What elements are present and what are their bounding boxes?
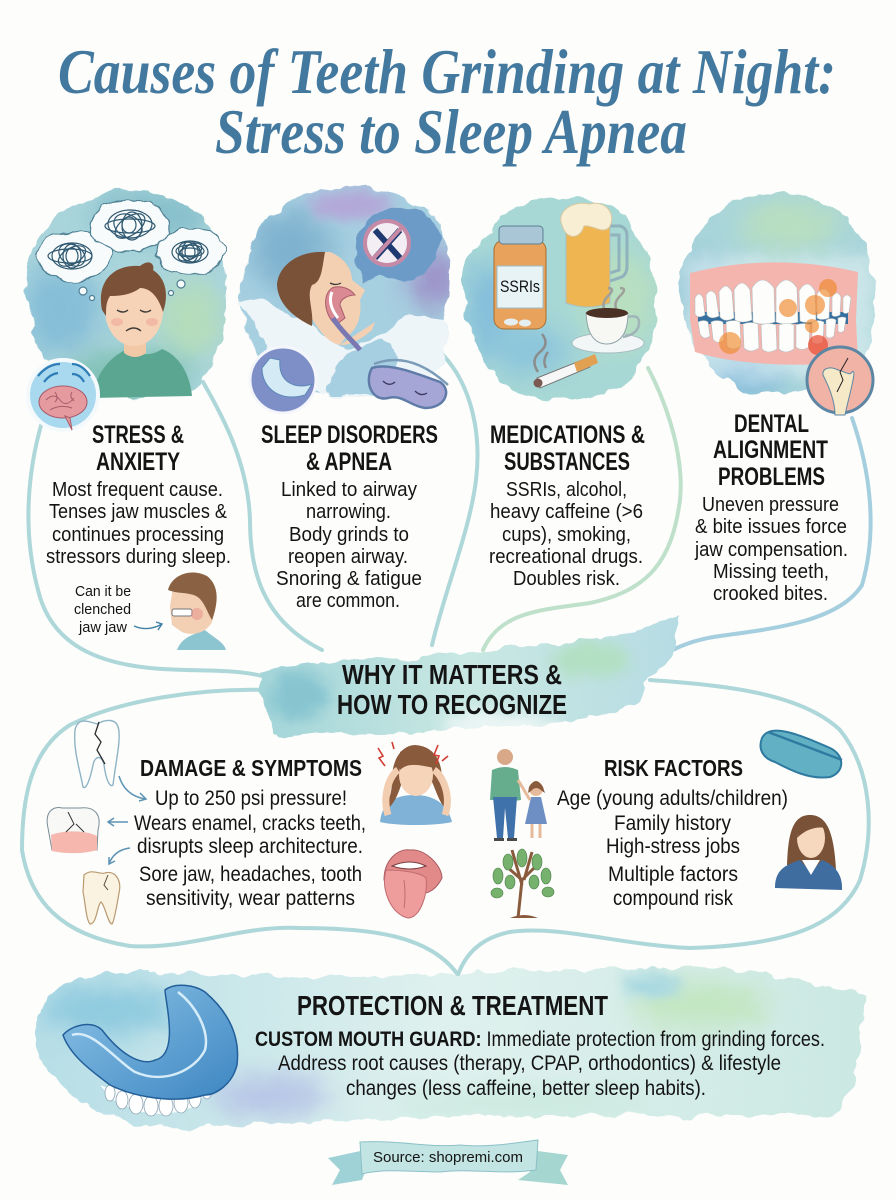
text: dental description: & bite issues force	[695, 516, 847, 538]
text: dental description: jaw compensation.	[694, 539, 848, 561]
text: risk factors: Family history	[614, 812, 731, 835]
text: damage and symptoms: Wears enamel, cracks teeth,	[134, 812, 366, 835]
text: treatment description	[255, 1028, 825, 1100]
heading: sleep disorders and apnea	[261, 421, 438, 476]
title: Stress to Sleep Apnea	[215, 97, 687, 167]
panel: dental alignment problems	[678, 191, 876, 600]
text: sleep description: Body grinds to	[289, 524, 409, 546]
banner: why it matters and how to recognize: WHY IT MATTERS &	[342, 659, 562, 690]
heading: risk factors: RISK FACTORS	[604, 755, 743, 781]
heading: dental alignment problems	[713, 410, 828, 491]
text: medications description: heavy caffeine (>6	[490, 501, 643, 523]
heading: stress and anxiety	[92, 421, 184, 476]
text: treatment description: Address root causes (therapy, CPAP, orthodontics) & lifestyle	[278, 1052, 781, 1075]
text: dental description	[694, 494, 848, 605]
text: stress description: stressors during sleep.	[46, 546, 231, 568]
text: risk factors: compound risk	[613, 887, 733, 910]
banner: protection and treatment	[20, 960, 870, 1130]
text: sleep description	[276, 479, 422, 612]
source ribbon	[328, 1140, 568, 1185]
arrows: from tooth illustrations to text	[108, 776, 146, 864]
illustration: pills, beer, coffee, cigarette: SSRIs	[500, 277, 540, 296]
icon: mouth with tongue	[384, 850, 442, 918]
panel: damage and symptoms	[47, 720, 452, 924]
text: damage and symptoms: sensitivity, wear patterns	[146, 887, 355, 910]
title	[58, 37, 836, 167]
text: stress description	[46, 479, 231, 568]
icon: sleep mask	[369, 360, 448, 408]
banner: why it matters and how to recognize: HOW TO RECOGNIZE	[337, 689, 567, 720]
panel: sleep disorders and apnea	[235, 180, 460, 612]
icon: worn molar	[47, 808, 99, 853]
panel: medications and substances	[461, 196, 658, 585]
connector lines between panels	[22, 345, 871, 975]
banner: why it matters and how to recognize	[258, 615, 680, 738]
text: sleep description: Snoring & fatigue	[276, 568, 422, 590]
text: treatment description: CUSTOM MOUTH GUARD: Immediate protection from grinding forces.	[255, 1028, 825, 1051]
icon: cracked tooth	[75, 720, 119, 788]
callout: clenched jaw: jaw jaw	[78, 619, 127, 636]
text: damage and symptoms: Up to 250 psi pressure!	[155, 787, 347, 810]
text: medications description: Doubles risk.	[513, 568, 620, 590]
illustration: misaligned teeth	[678, 191, 876, 416]
heading: damage and symptoms: DAMAGE & SYMPTOMS	[140, 755, 362, 781]
panel: stress and anxiety	[15, 180, 240, 650]
icon: custom mouth guard	[63, 985, 238, 1116]
heading: dental alignment problems: PROBLEMS	[718, 463, 825, 491]
heading: dental alignment problems: DENTAL	[734, 410, 809, 438]
source ribbon: Source: shopremi.com	[373, 1149, 523, 1166]
illustration: pills, beer, coffee, cigarette	[461, 196, 658, 402]
icon: businesswoman	[775, 815, 842, 890]
panel: risk factors	[490, 731, 842, 918]
text: medications description: cups), smoking,	[502, 524, 631, 546]
text: medications description: recreational drugs.	[489, 546, 643, 568]
text: damage and symptoms: Sore jaw, headaches, tooth	[139, 863, 362, 886]
heading: stress and anxiety: STRESS &	[92, 421, 184, 449]
heading: sleep disorders and apnea: SLEEP DISORDERS	[261, 421, 438, 449]
text: stress description: Tenses jaw muscles &	[49, 501, 228, 523]
icon: adult and child	[490, 749, 547, 841]
text: medications description: SSRIs, alcohol,	[506, 479, 627, 501]
text: dental description: crooked bites.	[713, 583, 828, 605]
text: risk factors	[557, 787, 788, 910]
text: stress description: continues processing	[52, 524, 224, 546]
text: treatment description: changes (less caffeine, better sleep habits).	[346, 1077, 706, 1100]
icon: blue sleep mask	[761, 731, 842, 778]
text: damage and symptoms: disrupts sleep architecture.	[137, 835, 363, 858]
icon: family tree	[491, 849, 554, 918]
text: sleep description: Linked to airway	[281, 479, 417, 501]
heading: medications and substances: MEDICATIONS &	[490, 421, 645, 449]
text: dental description: Uneven pressure	[702, 494, 839, 516]
icon: woman with headache	[378, 742, 452, 825]
text: sleep description: are common.	[296, 590, 400, 612]
icon: chipped tooth	[83, 872, 120, 924]
text: sleep description: reopen airway.	[288, 546, 408, 568]
heading: dental alignment problems: ALIGNMENT	[713, 436, 828, 464]
heading: medications and substances: SUBSTANCES	[504, 448, 630, 476]
text: risk factors: Age (young adults/children)	[557, 787, 788, 810]
text: sleep description: narrowing.	[306, 501, 391, 523]
callout: clenched jaw	[74, 572, 226, 650]
heading: medications and substances	[490, 421, 645, 476]
text: stress description: Most frequent cause.	[52, 479, 223, 501]
heading: sleep disorders and apnea: & APNEA	[306, 448, 392, 476]
callout: clenched jaw: Can it be	[75, 583, 131, 600]
text: damage and symptoms	[134, 787, 366, 910]
icon: brain with stress waves	[28, 360, 98, 430]
text: dental description: Missing teeth,	[713, 561, 829, 583]
heading: stress and anxiety: ANXIETY	[96, 448, 180, 476]
icon: mouth guard badge	[250, 347, 316, 413]
callout: clenched jaw: clenched	[74, 601, 131, 618]
illustration: stressed person with thought clouds	[24, 188, 227, 400]
text: medications description	[489, 479, 643, 590]
text: risk factors: Multiple factors	[608, 863, 738, 886]
heading: protection and treatment: PROTECTION & TREATMENT	[297, 990, 608, 1021]
illustration: sleeping man with blocked airway	[235, 180, 460, 405]
text: risk factors: High-stress jobs	[606, 835, 740, 858]
